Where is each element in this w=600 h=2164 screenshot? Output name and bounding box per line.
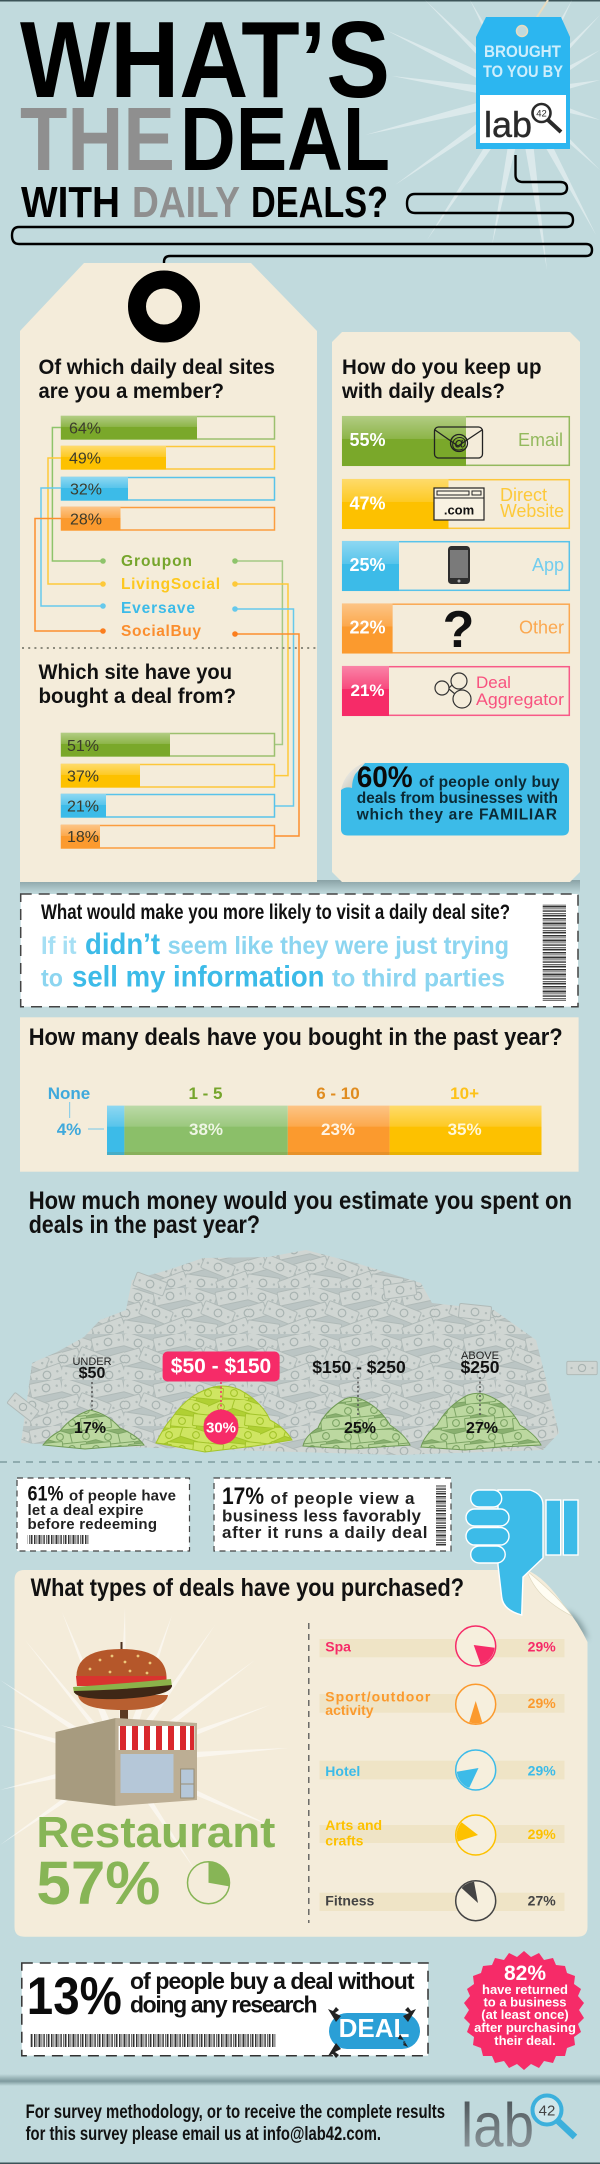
coupon: 61% let deals expire: before redeeming — [28, 1516, 157, 1533]
row: arts and crafts: Arts and — [325, 1817, 382, 1833]
bar: direct website 47% — [342, 479, 569, 529]
starburst: 82% returned: their deal. — [494, 2033, 556, 2048]
page curl — [527, 1571, 572, 1616]
bar chart: membership: 28% — [70, 512, 102, 528]
panel: keeping up with deals — [332, 332, 580, 882]
stacked bar labels: 10+ — [450, 1084, 479, 1103]
bucket: $150 - $250: 25% — [344, 1420, 376, 1437]
sunburst behind brand tag — [365, 0, 600, 270]
bucket: $150 - $250: $150 - $250 — [312, 1357, 406, 1377]
starburst: 82% returned: have returned — [482, 1982, 568, 1997]
row: hotel: Hotel — [325, 1763, 360, 1779]
row: spa — [320, 1626, 564, 1666]
row: fitness: Fitness — [325, 1893, 375, 1909]
coupon: more likely to visit: sell my information — [72, 961, 324, 994]
callout: 60% familiar — [341, 761, 569, 836]
bar: other 22%: Other — [519, 618, 564, 638]
bucket: above $250: 27% — [466, 1420, 498, 1437]
brand tag: brought to you by lab42: TO YOU BY — [483, 62, 564, 81]
footer text: for this survey please email us at info@lab42.com. — [26, 2124, 381, 2145]
coupon: more likely to visit — [21, 894, 578, 1007]
heading: keep up — [341, 356, 542, 403]
starburst: 82% returned — [464, 1951, 584, 2070]
footer text — [26, 2102, 445, 2145]
heading: money spent: deals in the past year? — [29, 1211, 260, 1239]
coupon: 13% no research — [22, 1963, 428, 2058]
title: DAILY — [132, 178, 240, 227]
bar: other 22%: 22% — [350, 618, 386, 638]
bar: other 22%: ? — [443, 601, 474, 659]
callout: 60% familiar: which they are FAMILIAR — [356, 806, 557, 824]
bucket: above $250 — [421, 1350, 541, 1450]
bar: deal aggregator 21%: 21% — [350, 681, 385, 700]
brand tag: brought to you by lab42: lab — [484, 104, 532, 145]
starburst: 82% returned: (at least once) — [481, 2007, 569, 2022]
brand tag: brought to you by lab42: 42 — [536, 108, 547, 120]
title: DEAL — [180, 90, 390, 190]
row: hotel: 29% — [528, 1763, 556, 1779]
grey money mound — [21, 1250, 559, 1455]
bucket: $50 - $150 highlighted: $50 - $150 — [171, 1355, 271, 1378]
bar: direct website 47%: .com — [444, 502, 474, 518]
bar chart: membership: 49% — [69, 450, 101, 468]
button: deal with cursors — [328, 2007, 420, 2058]
bucket: under $50: 17% — [74, 1420, 106, 1437]
callout: 60% familiar: 60% — [357, 761, 413, 794]
bar chart: membership: 64% — [69, 420, 101, 438]
panel: how many deals — [20, 1017, 579, 1172]
title — [20, 0, 390, 227]
coupon: 17% view less favorably: after it runs a daily deal — [222, 1523, 428, 1542]
panel: how many deals: How many deals have you bought in the past year? — [29, 1024, 563, 1051]
tag hole ring — [137, 280, 191, 334]
row: hotel — [320, 1750, 564, 1790]
coupon: 13% no research: doing any research — [130, 1992, 318, 2018]
stat: restaurant 57%: Restaurant — [36, 1808, 276, 1857]
callout: 60% familiar: of people only buy — [419, 774, 560, 791]
heading: bought from: bought a deal from? — [38, 685, 236, 708]
heading: keep up: How do you keep up — [342, 356, 542, 379]
coupon: more likely to visit: If it — [41, 932, 77, 960]
panel: left price tag: LivingSocial — [121, 576, 220, 593]
stacked bar labels: 1 - 5 — [188, 1084, 223, 1103]
stacked bar: 23% — [321, 1120, 355, 1139]
title: WITH — [21, 178, 120, 227]
coupon: 61% let deals expire — [17, 1478, 190, 1551]
coupon: 13% no research: 13% — [27, 1967, 122, 2026]
panel: types of deals — [0, 1570, 588, 1937]
title: THE — [20, 90, 175, 190]
coupon: 17% view less favorably: of people view a — [270, 1489, 415, 1508]
panel: left price tag: Groupon — [121, 553, 192, 570]
coupon: more likely to visit: to — [41, 965, 63, 993]
sunburst behind restaurant — [0, 1608, 288, 1870]
coupon: 17% view less favorably: business less favorably — [222, 1507, 422, 1526]
panel shadows — [20, 880, 580, 894]
panel: left price tag — [20, 263, 317, 882]
footer logo: lab42: 42 — [539, 2102, 555, 2120]
button: deal with cursors: DEAL — [339, 2013, 410, 2043]
bar chart: purchases: 21% — [67, 798, 99, 816]
brand tag: brought to you by lab42 — [476, 0, 570, 149]
bucket: under $50: $50 — [79, 1365, 105, 1382]
footer logo: lab42: lab — [461, 2092, 534, 2161]
heading: bought from — [38, 661, 236, 708]
stat: restaurant 57% — [36, 1808, 276, 1917]
tag string — [12, 155, 592, 272]
stacked bar labels: 6 - 10 — [316, 1084, 360, 1103]
bar: email 55% — [342, 416, 569, 466]
row: sport/outdoor activity: Sport/outdoor — [325, 1689, 431, 1705]
bar: email 55%: Email — [518, 430, 563, 450]
bar: email 55%: @ — [451, 436, 467, 452]
row: fitness: 27% — [528, 1893, 556, 1909]
coupon: 17% view less favorably: 17% — [222, 1483, 264, 1510]
bucket: $50 - $150 highlighted: 30% — [206, 1420, 236, 1436]
stacked bar: 38% — [189, 1120, 223, 1139]
bar: app 25%: 25% — [350, 555, 386, 575]
bucket: above $250: ABOVE — [461, 1350, 499, 1362]
icon: thumbs down — [466, 1490, 578, 1615]
coupon: 13% no research: of people buy a deal without — [130, 1968, 415, 1994]
stacked bar labels: None — [48, 1084, 90, 1103]
stacked bar: 35% — [448, 1120, 482, 1139]
title: WHAT’S — [20, 0, 390, 121]
row: arts and crafts — [320, 1815, 564, 1855]
footer text: For survey methodology, or to receive the complete results — [26, 2102, 445, 2123]
site legend with connectors — [35, 428, 299, 836]
coupon: more likely to visit: seem like they were just trying — [168, 932, 509, 960]
bar: email 55%: 55% — [350, 430, 386, 450]
panel: left price tag: SocialBuy — [121, 623, 201, 640]
bucket: $50 - $150 highlighted — [156, 1352, 292, 1452]
bucket: under $50 — [43, 1356, 144, 1449]
stat: restaurant 57%: 57% — [36, 1849, 160, 1917]
row: sport/outdoor activity: activity — [325, 1702, 374, 1718]
bar chart: purchases: 51% — [67, 738, 99, 755]
bar: app 25%: App — [532, 555, 564, 575]
coupon: 61% let deals expire: of people have — [69, 1488, 176, 1505]
row: sport/outdoor activity: 29% — [528, 1695, 556, 1711]
stacked bar — [107, 1106, 542, 1155]
row: fitness — [320, 1881, 564, 1921]
starburst: 82% returned: to a business — [483, 1995, 567, 2010]
coupon: more likely to visit: didn’t — [85, 928, 160, 961]
bucket: under $50: UNDER — [72, 1356, 112, 1368]
bar: deal aggregator 21% — [342, 666, 569, 716]
coupon: 61% let deals expire: let a deal expire — [28, 1502, 144, 1519]
heading: member sites — [38, 356, 275, 403]
starburst: 82% returned: 82% — [504, 1962, 546, 1985]
callout: 60% familiar: deals from businesses with — [357, 790, 558, 807]
bar chart: purchases — [61, 733, 274, 848]
bucket: above $250: $250 — [461, 1357, 500, 1377]
bar chart: membership: 32% — [70, 482, 102, 498]
heading: keep up: with daily deals? — [341, 380, 505, 403]
coupon: 61% let deals expire: 61% — [28, 1483, 64, 1506]
barcode — [543, 904, 566, 1001]
heading: member sites: are you a member? — [38, 380, 224, 403]
heading: member sites: Of which daily deal sites — [38, 356, 275, 379]
stacked bar labels: 4% — [57, 1120, 81, 1139]
bucket: $150 - $250 — [303, 1357, 410, 1449]
bar: direct website 47%: Direct — [500, 485, 547, 505]
bar: other 22% — [342, 601, 569, 659]
bar: direct website 47%: Website — [500, 501, 564, 521]
panel: left price tag: Eversave — [121, 600, 195, 617]
brand tag: brought to you by lab42: BROUGHT — [484, 42, 562, 61]
bar: deal aggregator 21%: Aggregator — [476, 690, 564, 709]
coupon: more likely to visit: to third parties — [332, 965, 505, 993]
stacked bar labels — [48, 1084, 479, 1139]
bar: direct website 47%: 47% — [350, 494, 386, 514]
bar chart: purchases: 37% — [67, 768, 99, 786]
heading: money spent — [29, 1187, 572, 1239]
row: arts and crafts: crafts — [325, 1833, 364, 1849]
panel: types of deals: What types of deals have you purchased? — [31, 1574, 464, 1602]
row: spa: 29% — [528, 1639, 556, 1655]
heading: bought from: Which site have you — [38, 661, 232, 684]
row: spa: Spa — [325, 1639, 351, 1655]
bar chart: purchases: 18% — [67, 829, 99, 846]
bar: app 25% — [342, 541, 569, 591]
icon: burger restaurant — [56, 1642, 197, 1806]
row: arts and crafts: 29% — [528, 1826, 556, 1842]
bar chart: membership — [61, 416, 274, 530]
row: sport/outdoor activity — [320, 1684, 564, 1724]
chart: money pile with spend buckets — [7, 1250, 597, 1455]
bar: deal aggregator 21%: Deal — [476, 673, 511, 692]
coupon: 17% view less favorably — [214, 1478, 451, 1551]
starburst: 82% returned: after purchasing — [474, 2020, 576, 2035]
title: DEALS? — [251, 178, 388, 227]
